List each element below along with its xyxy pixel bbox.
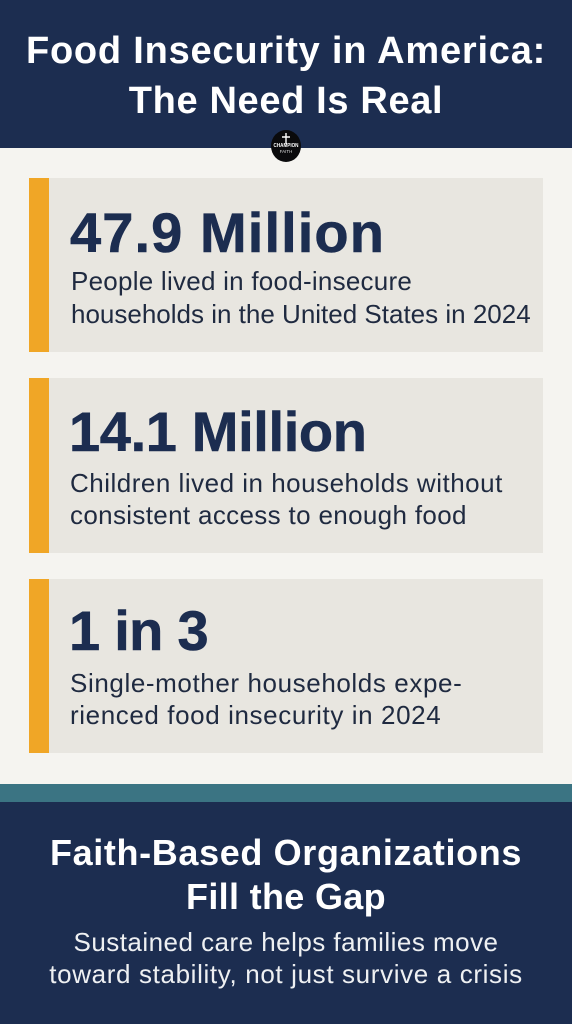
accent bar: [29, 178, 49, 352]
panel: stat 14.1 million: [29, 378, 543, 553]
card background: [49, 178, 543, 352]
panel: stat 1 in 3: [29, 579, 543, 753]
accent bar: [29, 579, 49, 753]
teal divider band: [0, 784, 572, 802]
footer text: Sustained care helps families move: [74, 927, 498, 957]
stat number: 47.9 Million: [70, 201, 385, 264]
card background: [49, 579, 543, 753]
footer text line 2: toward stability, not just survive a crisis: [49, 959, 523, 989]
icon: logo badge: [271, 130, 301, 162]
stat description line 2: households in the United States in 2024: [71, 299, 531, 329]
title: Food Insecurity in America:: [26, 30, 546, 72]
panel: stat 47.9 million: [29, 178, 543, 352]
subtitle: The Need Is Real: [129, 80, 443, 122]
footer heading line 2: Fill the Gap: [186, 876, 386, 917]
stat description line 2: rienced food insecurity in 2024: [70, 700, 441, 730]
stat description: Children lived in households without: [70, 468, 503, 498]
footer heading: Faith-Based Organizations: [50, 832, 522, 873]
header band: [0, 0, 572, 148]
accent bar: [29, 378, 49, 553]
stat description: Single-mother households expe-: [70, 668, 462, 698]
card background: [49, 378, 543, 553]
stat number: 1 in 3: [69, 599, 208, 662]
stat number: 14.1 Million: [69, 400, 367, 463]
stat description line 2: consistent access to enough food: [70, 500, 467, 530]
stat description: People lived in food-insecure: [71, 266, 412, 296]
icon: logo badge: FAITH: [280, 149, 292, 154]
footer band: [0, 802, 572, 1024]
